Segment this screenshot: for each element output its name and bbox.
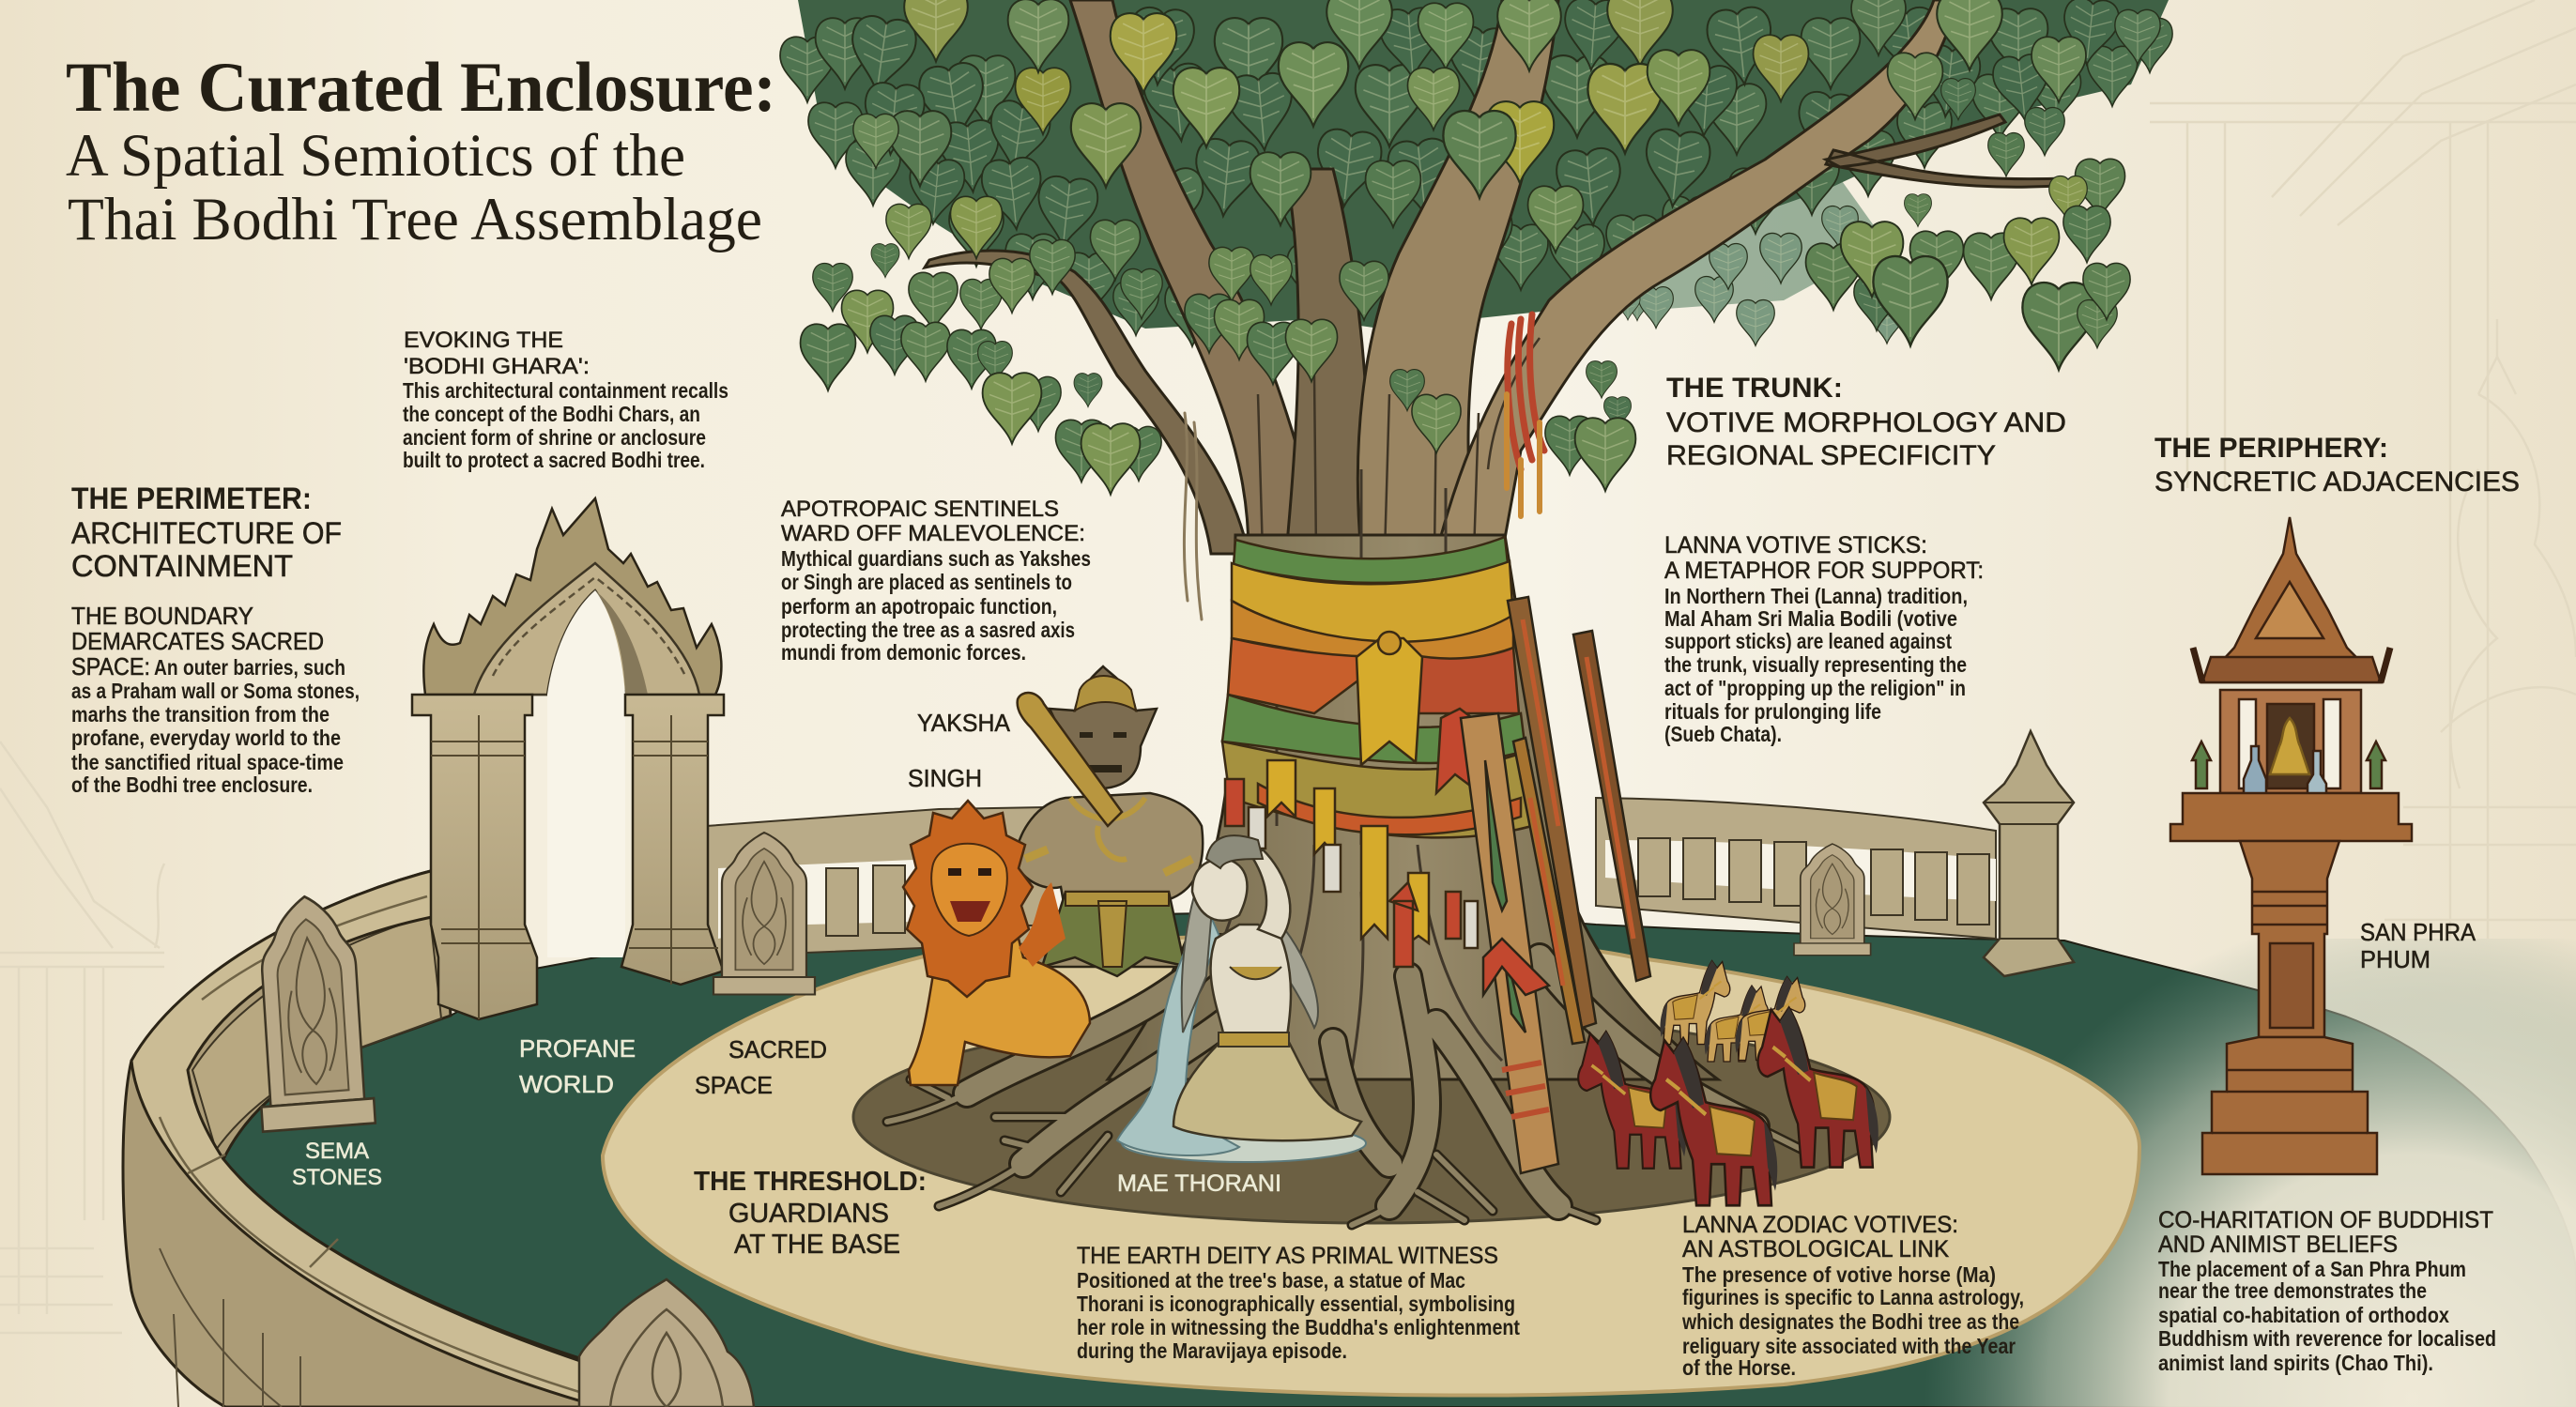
text: apotropaic sentinels: WARD OFF MALEVOLENCE: <box>781 521 1085 546</box>
heading: the threshold: GUARDIANS <box>728 1199 889 1229</box>
heading: the threshold: THE THRESHOLD: <box>694 1167 927 1197</box>
text: boundary demarcates sacred space: as a Praham wall or Soma stones, <box>71 679 360 703</box>
text: boundary demarcates sacred space: DEMARCATES SACRED <box>71 627 324 655</box>
floor: sacred space sand <box>603 936 2139 1396</box>
text: boundary demarcates sacred space: the sanctified ritual space-time <box>71 750 344 774</box>
wall inner face <box>192 915 441 1150</box>
watermark: temple drawing right <box>2150 0 2576 939</box>
text: lanna zodiac votives: figurines is specific to Lanna astrology, <box>1682 1285 2024 1309</box>
trunk grooves <box>1155 469 1502 1070</box>
text: earth deity: her role in witnessing the Buddha's enlightenment <box>1077 1315 1520 1339</box>
votive sticks <box>1461 597 1650 1173</box>
text: earth deity: during the Maravijaya episode. <box>1077 1338 1347 1363</box>
heading: the threshold: AT THE BASE <box>734 1230 900 1260</box>
text: boundary demarcates sacred space: THE BOUNDARY <box>71 602 253 630</box>
yaksha skirt <box>1042 892 1185 976</box>
shrine vases <box>2244 746 2266 798</box>
kneeling skirt <box>1173 1037 1361 1140</box>
text: evoking the bodhi ghara: 'BODHI GHARA': <box>404 354 590 379</box>
label: sema stones: SEMA <box>305 1139 369 1164</box>
text: evoking the bodhi ghara: the concept of the Bodhi Chars, an <box>403 402 700 426</box>
text: earth deity: THE EARTH DEITY AS PRIMAL WITNESS <box>1077 1243 1498 1269</box>
heading: the periphery: THE PERIPHERY: <box>2154 433 2388 464</box>
title <box>66 49 776 253</box>
san phra phum shrine <box>2170 517 2412 1174</box>
flowing hair <box>1182 864 1318 1032</box>
watermark: temple drawing left <box>0 742 164 1333</box>
label: profane world: PROFANE <box>519 1034 636 1063</box>
text: co-habitation of beliefs: CO-HARITATION OF BUDDHIST <box>2158 1207 2493 1233</box>
text: earth deity: Thorani is iconographically essential, symbolising <box>1077 1292 1515 1316</box>
heading: the perimeter: ARCHITECTURE OF <box>71 516 342 550</box>
label: sema stones <box>292 1139 382 1190</box>
text: apotropaic sentinels <box>781 497 1091 665</box>
text: lanna votive sticks: Mal Aham Sri Malia Bodili (votive <box>1664 606 1957 631</box>
railing post <box>1984 731 2074 976</box>
arch crown <box>423 498 721 695</box>
text: boundary demarcates sacred space: An outer barries, such <box>154 655 345 680</box>
text: lanna zodiac votives <box>1681 1212 2024 1380</box>
text: co-habitation of beliefs: spatial co-habitation of orthodox <box>2158 1303 2449 1327</box>
label: san phra phum <box>2360 918 2476 973</box>
floor: fade lower right <box>1784 939 2576 1407</box>
back canopy <box>1577 178 1887 310</box>
text: lanna votive sticks: the trunk, visually representing the <box>1664 652 1967 677</box>
heading: the trunk <box>1666 373 2066 471</box>
sema stone: large left <box>248 893 376 1132</box>
head and topknot <box>1192 859 1247 921</box>
text: co-habitation of beliefs: Buddhism with reverence for localised <box>2158 1326 2496 1351</box>
label: profane world <box>519 1034 636 1098</box>
label: sacred space: SPACE <box>695 1071 773 1099</box>
text: apotropaic sentinels: protecting the tree as a sasred axis <box>781 618 1075 642</box>
yaksha head <box>1050 666 1157 788</box>
lower trunk <box>1108 535 1718 1079</box>
heading: the periphery: SYNCRETIC ADJACENCIES <box>2154 466 2520 497</box>
canopy mass <box>798 0 2169 329</box>
label: sema stones: STONES <box>292 1165 382 1190</box>
branches <box>925 0 2070 554</box>
heading: the periphery <box>2154 433 2520 497</box>
railing: left <box>706 805 1155 967</box>
sema stone: front <box>579 1279 754 1407</box>
text: lanna votive sticks: (Sueb Chata). <box>1664 722 1782 746</box>
singh guardian yaksha <box>903 666 1203 1085</box>
text: evoking the bodhi ghara: EVOKING THE <box>404 328 563 353</box>
label: san phra phum: PHUM <box>2360 945 2430 973</box>
text: co-habitation of beliefs: animist land spirits (Chao Thi). <box>2158 1351 2433 1375</box>
text: evoking the bodhi ghara: This architectural containment recalls <box>403 378 728 403</box>
horse figurines: tan <box>1660 961 1805 1062</box>
text: lanna zodiac votives: of the Horse. <box>1682 1355 1796 1380</box>
text: lanna votive sticks: LANNA VOTIVE STICKS: <box>1664 532 1927 558</box>
text: apotropaic sentinels: or Singh are placed as sentinels to <box>781 570 1072 594</box>
heading: the trunk: REGIONAL SPECIFICITY <box>1666 440 1996 471</box>
text: lanna votive sticks: In Northern Thei (Lanna) tradition, <box>1664 584 1968 608</box>
sema stone: right <box>1794 844 1871 956</box>
text: lanna zodiac votives: LANNA ZODIAC VOTIVES: <box>1682 1212 1958 1238</box>
text: apotropaic sentinels: mundi from demonic forces. <box>781 640 1026 665</box>
floor: inner earth circle <box>853 1011 1890 1223</box>
prayer threads on branch <box>1184 314 1544 619</box>
text: lanna zodiac votives: religuary site associated with the Year <box>1682 1334 2016 1358</box>
text: lanna votive sticks: A METAPHOR FOR SUPPORT: <box>1664 558 1984 584</box>
label: singh: SINGH <box>908 764 982 792</box>
text: lanna votive sticks: support sticks) are leaned against <box>1664 629 1952 653</box>
title: The Curated Enclosure: <box>66 49 776 127</box>
text: apotropaic sentinels: perform an apotropaic function, <box>781 594 1057 619</box>
wall top rim <box>131 868 732 1407</box>
text: evoking the bodhi ghara: built to protect a sacred Bodhi tree. <box>403 448 705 472</box>
pool of water <box>1122 1124 1366 1162</box>
text: lanna zodiac votives: which designates the Bodhi tree as the <box>1681 1309 2019 1334</box>
water stream <box>1117 906 1239 1155</box>
text: evoking the bodhi ghara <box>403 328 728 472</box>
shrine deck <box>2170 793 2412 841</box>
yaksha body <box>1015 793 1203 967</box>
tree <box>780 0 2172 1225</box>
label: sacred space <box>695 1035 827 1099</box>
text: lanna votive sticks: rituals for prulonging life <box>1664 699 1881 724</box>
text: boundary demarcates sacred space: profane, everyday world to the <box>71 726 341 750</box>
sema stone: back left <box>713 833 815 994</box>
torso <box>1211 925 1291 1042</box>
heading: the perimeter: THE PERIMETER: <box>71 482 312 515</box>
text: evoking the bodhi ghara: ancient form of shrine or anclosure <box>403 425 706 450</box>
heading: the perimeter <box>71 482 342 583</box>
canopy fill leaves <box>780 8 2172 346</box>
text: lanna zodiac votives: AN ASTBOLOGICAL LINK <box>1682 1236 1949 1262</box>
singh lion <box>909 920 1090 1085</box>
shrine house <box>2220 690 2361 793</box>
label: yaksha: YAKSHA <box>917 709 1011 737</box>
gateway arch <box>412 498 724 1019</box>
text: boundary demarcates sacred space: of the Bodhi tree enclosure. <box>71 772 313 797</box>
label: san phra phum: SAN PHRA <box>2360 918 2476 946</box>
text: co-habitation of beliefs: near the tree demonstrates the <box>2158 1278 2427 1303</box>
label: sacred space: SACRED <box>728 1035 827 1063</box>
text: boundary demarcates sacred space: marhs the transition from the <box>71 702 330 726</box>
label: mae thorani: MAE THORANI <box>1117 1170 1281 1197</box>
label: profane world: WORLD <box>519 1070 614 1098</box>
text: lanna votive sticks: act of "propping up the religion" in <box>1664 676 1966 700</box>
shrine base <box>2202 1037 2377 1174</box>
right pillar <box>621 695 724 985</box>
back leaves <box>1559 206 1905 345</box>
text: lanna votive sticks <box>1664 532 1984 746</box>
text: co-habitation of beliefs <box>2158 1207 2496 1375</box>
text: co-habitation of beliefs: AND ANIMIST BELIEFS <box>2158 1231 2398 1258</box>
raised arm <box>1253 849 1290 939</box>
heading: the trunk: VOTIVE MORPHOLOGY AND <box>1666 407 2066 438</box>
figure: mae thorani <box>1117 835 1366 1162</box>
heading: the trunk: THE TRUNK: <box>1666 373 1843 404</box>
heading: the threshold <box>694 1167 927 1260</box>
votive cloth wraps <box>1222 537 1532 967</box>
text: apotropaic sentinels: APOTROPAIC SENTINELS <box>781 497 1059 522</box>
title: A Spatial Semiotics of the <box>66 122 685 190</box>
floor: profane world <box>223 913 2576 1407</box>
text: earth deity <box>1077 1243 1520 1363</box>
text: boundary demarcates sacred space: SPACE: <box>71 652 150 681</box>
shrine finial and roof <box>2202 517 2381 682</box>
curved outer wall <box>123 868 751 1407</box>
text: apotropaic sentinels: Mythical guardians such as Yakshes <box>781 546 1091 571</box>
arch opening <box>547 590 625 957</box>
title: Thai Bodhi Tree Assemblage <box>68 186 762 253</box>
heading: the perimeter: CONTAINMENT <box>71 549 293 583</box>
yaksha club <box>1018 693 1122 826</box>
horse figurines: red <box>1578 1008 1878 1205</box>
text: earth deity: Positioned at the tree's base, a statue of Mac <box>1077 1268 1465 1292</box>
foreground leaves <box>801 0 2160 495</box>
text: boundary demarcates sacred space <box>71 602 360 797</box>
text: lanna zodiac votives: The presence of votive horse (Ma) <box>1682 1262 1996 1287</box>
left pillar <box>412 695 537 1019</box>
roots <box>887 948 1802 1225</box>
railing: right <box>1596 798 1996 939</box>
shrine buddha <box>2270 718 2309 774</box>
text: co-habitation of beliefs: The placement of a San Phra Phum <box>2158 1257 2466 1281</box>
shrine pillar <box>2240 841 2339 1037</box>
